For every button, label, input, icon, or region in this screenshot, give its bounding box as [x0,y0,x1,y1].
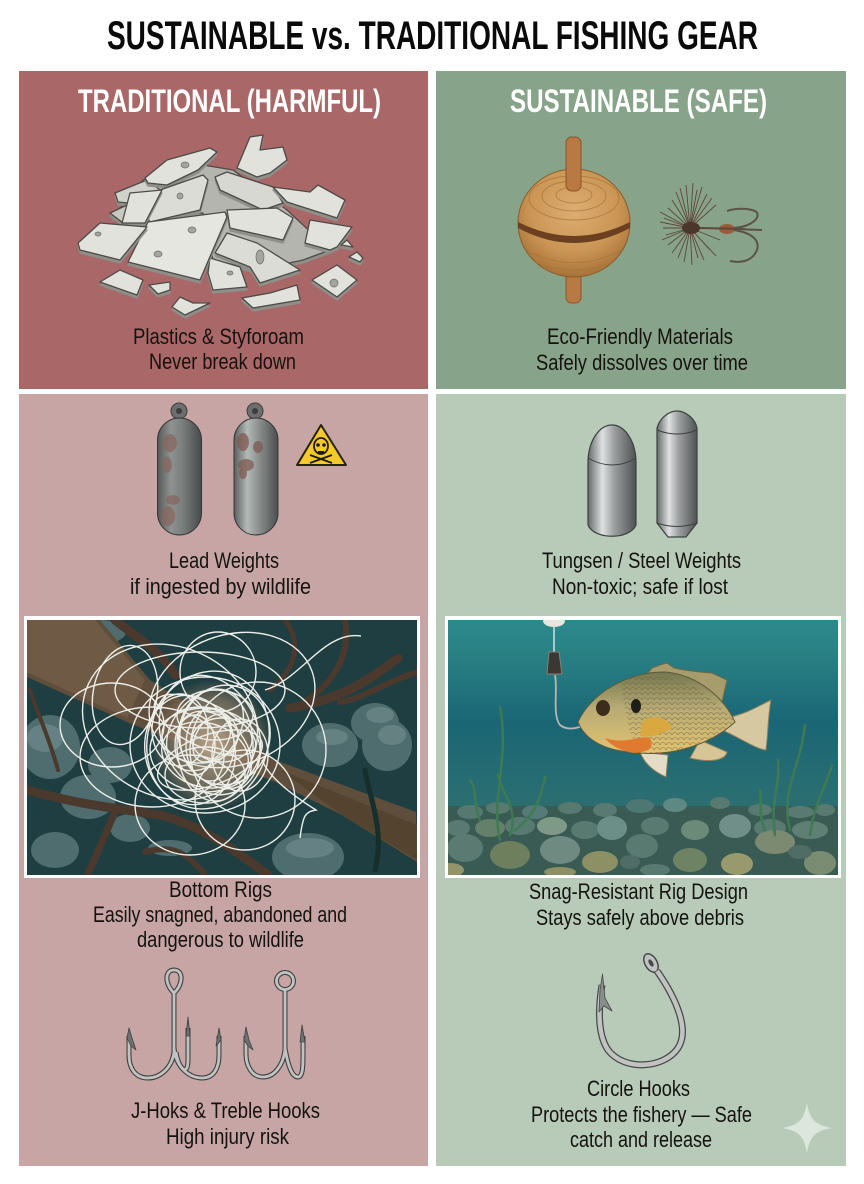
text: lead label: if ingested by wildlife [130,574,311,599]
text: lead label [130,548,311,599]
text: eco-friendly label: Safely dissolves over time [536,350,748,375]
text: snag-resistant label [529,879,748,930]
text: tungsten label: Tungsen / Steel Weights [542,548,741,573]
sunfish [578,663,771,777]
heading: sustainable: SUSTAINABLE (SAFE) [510,83,767,119]
text: plastics label [133,324,304,374]
text: circle hooks label: Circle Hooks [587,1076,690,1101]
icon: fishing fly [660,183,762,265]
text: bottom rigs label: Bottom Rigs [169,877,272,902]
text: bottom rigs label [93,877,347,952]
text: plastics label: Plastics & Styforoam [133,324,304,349]
image: tangled line on a submerged log [20,610,420,881]
text: circle hooks label: catch and release [570,1127,712,1152]
text: eco-friendly label: Eco-Friendly Materials [547,324,733,349]
panel: sustainable gear details [436,394,846,1166]
text: hooks label [131,1098,320,1149]
text: tungsten label [542,548,741,599]
text: circle hooks label [531,1076,752,1152]
panel: sustainable header section [436,71,846,389]
tangle of fishing line [57,610,361,855]
text: tungsten label: Non-toxic; safe if lost [552,574,728,599]
text: snag-resistant label: Snag-Resistant Rig Design [529,879,748,904]
icon: tungsten and steel weights [588,411,697,537]
panel: traditional header section [19,71,428,389]
text: bottom rigs label: dangerous to wildlife [137,927,304,952]
icon: styrofoam pile [78,135,363,315]
text: bottom rigs label: Easily snagned, abandoned and [93,902,347,927]
pebbles [436,797,838,877]
text: snag-resistant label: Stays safely above debris [536,905,744,930]
panel: traditional gear details [19,394,428,1166]
icon: sparkle mark [782,1103,832,1153]
image: sunfish with snag-resistant rig [436,615,841,878]
text: eco-friendly label [536,324,748,375]
icon: lead weights [158,403,278,535]
icon: wooden float [518,137,630,303]
text: hooks label: J-Hoks & Treble Hooks [131,1098,320,1123]
icon: treble hooks [127,970,305,1078]
rig line and sinker [543,615,582,728]
text: plastics label: Never break down [149,349,296,374]
icon: poison warning sign [297,425,346,465]
text: hooks label: High injury risk [166,1124,290,1149]
text: circle hooks label: Protects the fishery — Safe [531,1102,752,1127]
text: lead label: Lead Weights [169,548,279,573]
icon: circle hook [599,951,682,1065]
seaweed [470,707,832,840]
heading: traditional: TRADITIONAL (HARMFUL) [78,83,381,119]
